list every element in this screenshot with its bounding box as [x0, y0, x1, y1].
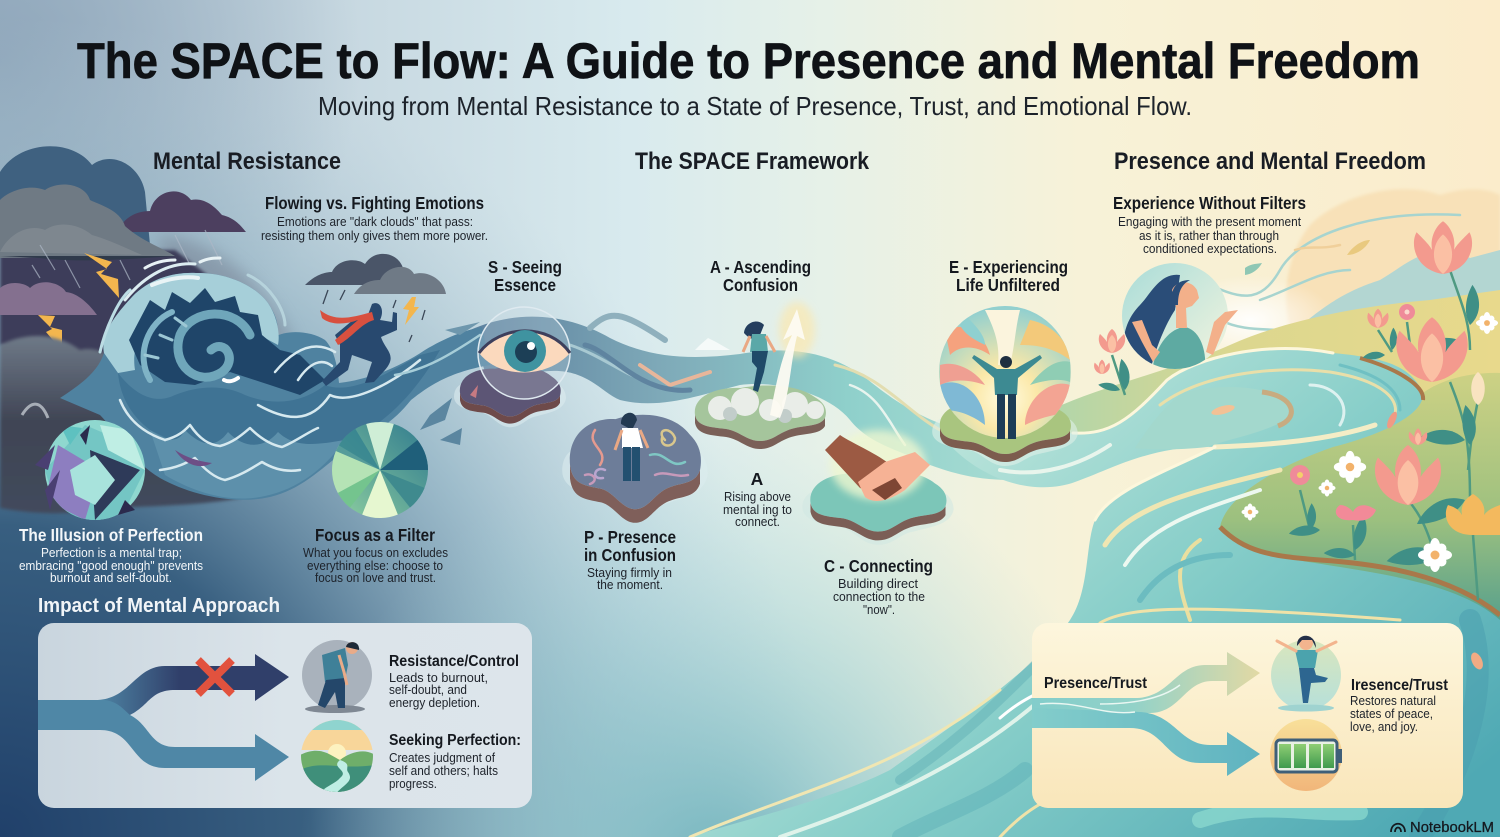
icon: crystal sphere	[35, 420, 145, 520]
heading: mental resistance: Mental Resistance	[153, 148, 341, 175]
text: perfection: progress.	[389, 776, 437, 791]
icon: small lightning	[403, 297, 419, 325]
text: illusion of perfection	[19, 525, 203, 585]
storm clouds	[0, 146, 295, 513]
icon: tulips	[1414, 221, 1472, 274]
river bands	[690, 349, 1478, 837]
text: perfection: self and others; halts	[389, 763, 498, 778]
text: connecting	[824, 556, 933, 617]
text: flowing vs fighting: resisting them only gives them more power.	[261, 228, 488, 243]
wave spiral	[100, 264, 285, 381]
dark curl interior	[129, 288, 325, 395]
text: presence in confusion	[584, 527, 676, 592]
person standing	[615, 413, 648, 481]
heading: space framework: The SPACE Framework	[635, 148, 870, 175]
arrow: energy	[1032, 708, 1260, 776]
small grey cloud	[354, 267, 446, 294]
island E	[932, 306, 1078, 466]
text: illusion of perfection: The Illusion of Perfection	[19, 525, 203, 545]
text: experience without filters: Engaging with the present moment	[1118, 214, 1301, 229]
heading: impact: Impact of Mental Approach	[38, 595, 280, 617]
text: focus as a filter: Focus as a Filter	[315, 525, 435, 545]
inner lake	[1135, 387, 1291, 449]
text: experience without filters	[1113, 193, 1306, 256]
icon: logo arcs	[1391, 824, 1405, 832]
text: seeing essence: Essence	[494, 275, 556, 295]
text: illusion of perfection: Perfection is a mental trap;	[41, 545, 182, 560]
text: presence in confusion: P - Presence	[584, 527, 676, 547]
icon: red cross	[198, 660, 232, 694]
left panel: impact of mental approach	[38, 623, 532, 808]
arrow: resistance	[95, 654, 289, 715]
wave foam	[120, 335, 480, 480]
icon: landscape	[300, 720, 375, 795]
text: outcome: Iresence/Trust	[1351, 677, 1449, 694]
cloud: lilac	[0, 282, 97, 315]
cloud: grey	[0, 185, 175, 258]
text: outcome: love, and joy.	[1350, 719, 1418, 734]
icon: battery	[1270, 719, 1342, 791]
right panel: presence outcomes	[1032, 623, 1463, 808]
text: ascending confusion: Confusion	[723, 275, 798, 295]
text: focus as a filter	[303, 525, 448, 585]
river	[690, 349, 1500, 837]
text: ascending detail	[723, 469, 792, 529]
label: presence trust: Presence/Trust	[1044, 675, 1148, 692]
island S: eye	[454, 307, 570, 427]
main wave	[60, 258, 490, 500]
text: ascending confusion: A - Ascending	[710, 257, 811, 277]
running figure	[322, 303, 397, 386]
text: connecting: C - Connecting	[824, 556, 933, 576]
text: resistance	[389, 653, 519, 710]
arrow: perfection	[38, 700, 289, 781]
cloud: purple	[118, 191, 246, 232]
text: outcome: states of peace,	[1350, 706, 1433, 721]
person rising	[743, 322, 775, 392]
arrow glow	[779, 302, 815, 358]
text: resistance: self-doubt, and	[389, 682, 467, 697]
text: outcome	[1350, 677, 1449, 734]
upper hill	[1040, 290, 1500, 440]
stream highlights	[570, 316, 940, 445]
subtitle: Moving from Mental Resistance to a State of Presence, Trust, and Emotional Flow.	[318, 91, 1192, 121]
panel background	[1032, 623, 1463, 808]
text: flowing vs fighting: Flowing vs. Fighting Emotions	[265, 193, 484, 213]
wind wisps	[1200, 214, 1460, 335]
text: flowing vs fighting	[261, 193, 488, 243]
text: resistance: Resistance/Control	[389, 653, 519, 670]
handshake island C	[802, 430, 954, 545]
text: connecting: connection to the	[833, 589, 925, 604]
icon: focus sphere	[332, 422, 428, 518]
text: experiencing life: Life Unfiltered	[956, 275, 1060, 295]
notebooklm logo: NotebookLM	[1410, 819, 1494, 836]
small dark cloud	[305, 254, 403, 285]
woman breathing	[1122, 263, 1262, 372]
text: focus as a filter: focus on love and trust.	[315, 570, 436, 585]
island P	[562, 413, 708, 523]
big stems and leaves	[1112, 270, 1478, 600]
panel background	[38, 623, 532, 808]
text: illusion of perfection: burnout and self-doubt.	[50, 570, 172, 585]
text: connecting: "now".	[863, 602, 895, 617]
arrow: presence	[1032, 652, 1260, 713]
text: ascending detail: connect.	[735, 514, 780, 529]
text: ascending detail: A	[751, 469, 764, 489]
lower hill	[1220, 373, 1500, 640]
island A	[695, 302, 826, 453]
person running	[305, 254, 446, 386]
rainbow sphere	[939, 306, 1072, 438]
text: experience without filters: Experience Without Filters	[1113, 193, 1306, 213]
icon: daisies	[1334, 451, 1366, 483]
light crest	[103, 273, 279, 373]
flowers and plants	[1094, 221, 1500, 600]
cloud: lower grey	[0, 336, 240, 513]
up arrow	[770, 309, 805, 418]
peach clouds	[1286, 189, 1500, 330]
text: illusion of perfection: embracing "good enough" prevents	[19, 558, 203, 573]
person arms open	[972, 355, 1042, 439]
rain	[32, 230, 222, 288]
text: resistance: energy depletion.	[389, 695, 480, 710]
wave bottom crests	[150, 430, 345, 498]
icon: lightning large	[84, 253, 119, 298]
text: resistance: Leads to burnout,	[389, 670, 488, 685]
text: ascending detail: mental ing to	[723, 502, 792, 517]
text: presence in confusion: Staying firmly in	[587, 565, 672, 580]
text: ascending detail: Rising above	[724, 489, 791, 504]
text: perfection	[389, 732, 521, 791]
text: experience without filters: conditioned expectations.	[1143, 241, 1277, 256]
text: seeing essence: S - Seeing	[488, 257, 562, 277]
text: focus as a filter: everything else: choose to	[307, 558, 443, 573]
text: seeing essence	[488, 257, 562, 295]
text: ascending confusion	[710, 257, 811, 295]
text: perfection: Seeking Perfection:	[389, 732, 521, 749]
icon: lightning small	[38, 315, 62, 351]
right landscape	[1040, 189, 1500, 640]
distant blue hill	[1290, 250, 1500, 345]
text: perfection: Creates judgment of	[389, 750, 495, 765]
icon: dancing woman	[1271, 636, 1341, 712]
text: presence in confusion: in Confusion	[584, 545, 676, 565]
text: outcome: Restores natural	[1350, 693, 1436, 708]
wave lower swell	[118, 350, 440, 470]
red scarf	[320, 310, 374, 345]
text: experiencing life: E - Experiencing	[949, 257, 1068, 277]
text: experience without filters: as it is, rather than through	[1139, 228, 1279, 243]
text: presence in confusion: the moment.	[597, 577, 663, 592]
text: focus as a filter: What you focus on excludes	[303, 545, 448, 560]
heading: presence and freedom: Presence and Mental Freedom	[1114, 148, 1426, 175]
icon: tired person	[302, 640, 372, 713]
cloud: dark blue	[0, 146, 150, 245]
text: connecting: Building direct	[838, 576, 918, 591]
text: experiencing life	[949, 257, 1068, 295]
mid stream	[470, 317, 1010, 480]
text: flowing vs fighting: Emotions are "dark clouds" that pass:	[277, 214, 473, 229]
